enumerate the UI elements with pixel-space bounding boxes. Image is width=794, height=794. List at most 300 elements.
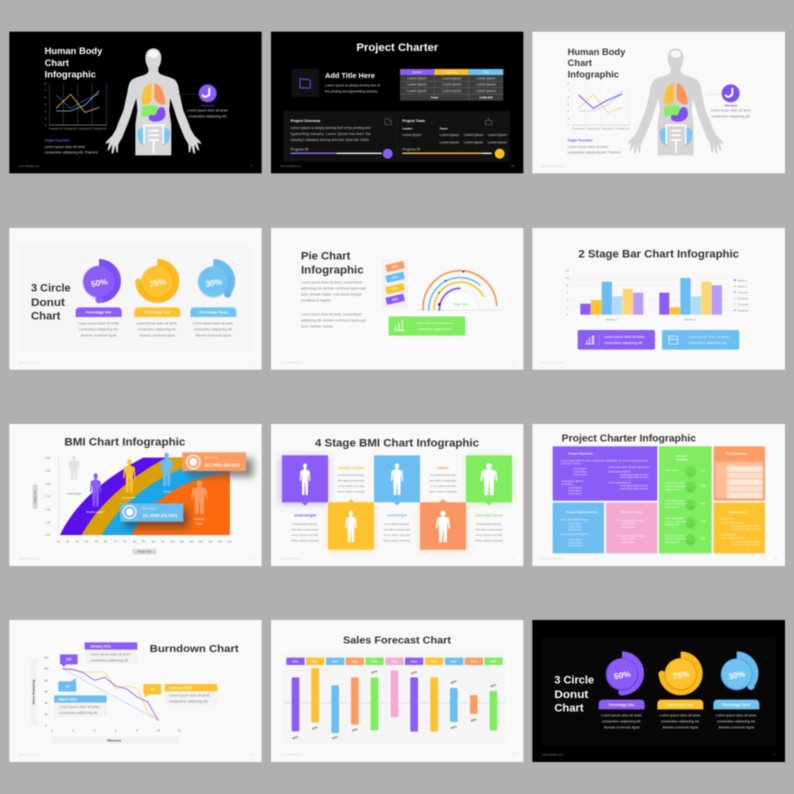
- green callout: Lorem ipsum dolor sit amet,: [417, 321, 454, 325]
- axes: 40: [57, 540, 60, 544]
- table: [400, 69, 503, 101]
- line chart: [568, 81, 630, 130]
- panel: project scope: Lorem ipsum dolor sit amet: [617, 534, 645, 537]
- axes: 1.70: [45, 495, 51, 499]
- panel: project timeline: Lorem ipsum: [665, 469, 679, 472]
- axes: Milestone: [107, 739, 122, 743]
- text block: add title: [325, 71, 380, 93]
- panel: project timeline: Lorem ipsum dolor: [665, 517, 685, 520]
- panel: project timeline: adipiscing elit: [665, 524, 679, 527]
- body illustration: [628, 48, 724, 155]
- axes: 0: [51, 728, 53, 732]
- panel: project overview: Lorem ipsum dolor sit: [561, 480, 584, 483]
- axes: 2: [72, 728, 74, 732]
- labels: Percentage One: [86, 311, 111, 315]
- footer: 8: [250, 557, 252, 561]
- stage: healthy weight: [328, 466, 374, 551]
- labels: Lorem ipsum dolor sit amet,: [716, 714, 757, 718]
- BMI bands: [60, 458, 230, 535]
- labels: consectetur adipiscing elit.: [137, 327, 177, 331]
- axes: 20: [45, 712, 48, 716]
- stage: clinically obese: of my entire soul, like: [476, 533, 503, 537]
- stage: underweight: has taken possession: [291, 528, 319, 532]
- axes: 90: [152, 540, 155, 544]
- axes: 40: [45, 701, 48, 705]
- footer: www.slidefab.com: [542, 753, 564, 757]
- table: Lorem ipsum: [476, 76, 496, 80]
- axes: 100: [44, 667, 49, 671]
- title: Burndown Chart: [150, 644, 239, 655]
- text block: organ function: [45, 138, 98, 154]
- panel: project timeline: adipiscing elit: [665, 488, 679, 491]
- panel: project overview: Project Overview: [568, 452, 593, 456]
- bar chart: Sample 1: [606, 318, 618, 322]
- panel: project overview: Lorem ipsum: [573, 470, 587, 473]
- stage: underweight: these sweet mornings: [291, 538, 319, 542]
- axes: 130: [227, 540, 232, 544]
- footer: [542, 753, 776, 757]
- footer: 10: [774, 557, 778, 561]
- stage: overweight: these sweet mornings: [383, 538, 411, 542]
- panel: project timeline: adipiscing elit: [665, 541, 679, 544]
- footer: 33: [511, 164, 514, 168]
- line chart: 5: [45, 102, 47, 106]
- percent labels: 80%: [312, 725, 319, 731]
- project team: Progress 90: [402, 148, 420, 152]
- line chart: 8: [568, 81, 570, 85]
- donut: 75 percent: 75%: [148, 276, 167, 289]
- panel: project timeline: 2021: [701, 503, 707, 505]
- labels: Lorem ipsum dolor sit amet,: [193, 321, 234, 325]
- labels: [599, 700, 759, 730]
- axes: 1.40: [45, 533, 51, 537]
- axes: 100: [170, 540, 175, 544]
- percent labels: 80%: [332, 735, 339, 741]
- callout: yellow value: 45: [150, 688, 154, 692]
- axes: 8: [136, 728, 138, 732]
- card: orange: BMI Range: [205, 456, 219, 460]
- table: Lorem ipsum: [407, 83, 427, 87]
- project team: Project Team: [402, 119, 426, 123]
- percent labels: 80%: [292, 735, 299, 741]
- labels: Aenean commodo ligula: [81, 333, 117, 337]
- axes: 120: [44, 655, 49, 659]
- text block: adipiscing elit. Aenean commodo ligula eget: [301, 286, 366, 290]
- card: blue: [120, 503, 188, 528]
- percent labels: 50%: [490, 683, 497, 689]
- panel: project overview: Lorem ipsum: [568, 493, 582, 496]
- project team: Leader:: [402, 127, 413, 131]
- text block: dolor. Aenean massa. Cum sociis natoque: [301, 292, 362, 296]
- footer: 5: [250, 360, 252, 364]
- stage: overweight: Overweight: [387, 513, 408, 517]
- text block: adipiscing elit. Aenean commodo ligula eget: [301, 318, 366, 322]
- callout: blue: Lorem ipsum dolor sit amet,: [688, 335, 729, 339]
- line chart: 5: [568, 102, 570, 106]
- tags: [382, 259, 492, 308]
- forecast bars: [292, 668, 497, 733]
- note: february: Lorem ipsum dolor sit amet,: [169, 693, 210, 697]
- year headers: 2013: [352, 659, 358, 663]
- stage: overweight: has taken possession: [383, 528, 411, 532]
- labels: consectetur adipiscing elit.: [79, 327, 118, 331]
- axes: 110: [189, 540, 194, 544]
- legend: Column4: [737, 296, 748, 300]
- project team: Lorem ipsum: [440, 140, 459, 144]
- title: Chart: [568, 58, 592, 68]
- project overview: typesetting industry. Lorem Ipsum has been the: [291, 132, 371, 136]
- axes: 65: [104, 540, 108, 544]
- axes: 105: [179, 540, 184, 544]
- footer: www.slidefab.com: [542, 557, 564, 561]
- title: Infographic: [301, 265, 364, 277]
- panel: 4 stage BMI slide: [271, 424, 523, 566]
- panel: burndown chart slide: [9, 620, 262, 762]
- bar chart: 0: [567, 313, 569, 317]
- card: blue: BMI Range: [143, 506, 156, 510]
- title: BMI Chart Infographic: [64, 437, 185, 449]
- panel: project scope: [606, 503, 657, 553]
- body illustration: [105, 48, 201, 155]
- text block: organ function: consectetur adipiscing elit. Praesent: [568, 150, 621, 154]
- callout: purple: Lorem ipsum dolor sit amet,: [604, 335, 645, 339]
- year headers: 2019: [471, 659, 477, 663]
- panel: project overview: Lorem ipsum dolor sit amet: [620, 487, 648, 490]
- panel: project overview: Lorem ipsum: [568, 487, 582, 490]
- stage: clinically obese: [466, 455, 512, 542]
- year headers: 2011: [312, 659, 318, 663]
- table: Budget: [412, 70, 422, 74]
- footer: 5: [774, 753, 776, 757]
- project team: Lorem ipsum: [464, 140, 483, 144]
- stage: clinically obese: has taken possession: [475, 528, 503, 532]
- text block: organ function: consectetur adipiscing elit. Praesent: [45, 150, 98, 154]
- panel: project overview: Lorem ipsum dolor sit amet, consectetur adipiscing elit, sed do eiusmod tempor: [561, 460, 649, 463]
- title: Infographic: [45, 70, 96, 80]
- table: Quantity: [446, 70, 458, 74]
- axes: 120: [208, 540, 213, 544]
- title: 3 Circle: [554, 675, 594, 687]
- project overview: industry's standard dummy text ever since the 1500s: [291, 138, 369, 142]
- tags: 80%: [392, 264, 399, 269]
- footer: www.slidefab.com: [18, 557, 40, 561]
- axes: [33, 456, 232, 554]
- footer: 9: [512, 557, 514, 561]
- donut: 50 percent: 50%: [90, 276, 109, 289]
- project team: Lorem ipsum: [464, 133, 483, 137]
- figures: Clinically: [194, 517, 205, 521]
- axes: 1.90: [45, 469, 51, 473]
- panel: human body chart dark slide: [9, 32, 262, 173]
- stage: underweight: A wonderful serenity: [292, 522, 318, 526]
- labels: Percentage Three: [722, 703, 750, 707]
- bar chart: [566, 269, 728, 322]
- panel: project team: Project Team: [728, 510, 747, 514]
- footer: www.slidefab.com: [280, 360, 302, 364]
- bar chart: 6: [567, 291, 569, 295]
- callout: stomach: consectetur adipiscing elit.: [188, 114, 227, 118]
- axes: Height (m): [33, 490, 37, 503]
- panel: 3 circle donut dark slide: [532, 620, 785, 762]
- panel: project overview: Lorem ipsum: [573, 473, 587, 476]
- project team: Team:: [440, 127, 448, 131]
- axes: 1.60: [45, 508, 51, 512]
- line chart: 6: [568, 95, 570, 99]
- panel: project charter infographic slide: [532, 424, 785, 566]
- donut: 50 percent: [606, 655, 640, 696]
- callout: purple: [578, 330, 655, 350]
- footer: 11: [250, 753, 253, 757]
- year headers: 2014: [371, 659, 378, 663]
- axes: 2.00: [45, 456, 51, 460]
- panel: project overview and team: [283, 111, 510, 162]
- panel: project budget: [714, 446, 765, 501]
- table: Total: [483, 70, 489, 74]
- text block: add title: the printing and typesetting industry: [325, 89, 378, 93]
- callout: stomach: Stomach: [725, 103, 737, 107]
- footer: [280, 557, 514, 561]
- title: [45, 46, 103, 80]
- panel: BMI chart slide: [9, 424, 262, 566]
- callout: blue: consectetur adipiscing elit.: [688, 341, 727, 345]
- donut: 50 percent: 50%: [613, 669, 632, 681]
- figures: Obese: [163, 490, 172, 494]
- stage: clinically obese: A wonderful serenity: [476, 522, 502, 526]
- table: Lorem ipsum: [476, 83, 496, 87]
- callout: blue value: [58, 678, 76, 692]
- panel: project overview: Lorem ipsum dolor sit: [608, 482, 631, 485]
- donut: 30 percent: [721, 655, 755, 690]
- note: march: March 2021: [59, 697, 77, 701]
- figures: Overweight: [122, 496, 135, 500]
- callout: purple: consectetur adipiscing elit.: [604, 341, 643, 345]
- year headers: [286, 658, 503, 665]
- panel: sales forecast slide: [271, 620, 523, 762]
- line chart: 6: [45, 95, 47, 99]
- project overview: Project Overview: [291, 119, 320, 123]
- panel: project scope: Lorem ipsum: [622, 526, 635, 529]
- labels: Aenean commodo ligula: [718, 726, 754, 730]
- labels: Percentage Two: [668, 703, 693, 707]
- line chart: 3: [45, 116, 47, 120]
- title: Chart: [45, 58, 69, 68]
- axes: 75: [123, 540, 127, 544]
- panel: project team: Lorem ipsum dolor sit amet: [732, 528, 760, 531]
- table: Lorem ipsum: [476, 89, 496, 93]
- labels: Lorem ipsum dolor sit amet,: [601, 714, 642, 718]
- text block: organ function: Organ Function: [568, 138, 592, 142]
- footer: [18, 753, 253, 757]
- axes: 60: [95, 540, 98, 544]
- panel: project budget: Project Budget: [726, 451, 747, 455]
- table: Total: [431, 95, 438, 99]
- text block: [301, 281, 366, 329]
- year headers: 2018: [451, 659, 457, 663]
- project team: Lorem ipsum: [488, 140, 507, 144]
- title: Chart: [554, 703, 584, 715]
- labels: Lorem ipsum dolor sit amet,: [660, 714, 701, 718]
- line chart: Category1 Category2 Category3 Category4: [49, 126, 107, 130]
- panel: project timeline: 2021: [701, 470, 707, 472]
- footer: 3: [774, 164, 776, 168]
- footer: www.slidefab.com: [18, 360, 40, 364]
- year headers: 2010: [292, 659, 299, 663]
- stage: overweight: of my entire soul, like: [384, 533, 411, 537]
- panel: project improvements: Lorem ipsum dolor sit amet: [560, 518, 588, 521]
- footer: [280, 164, 514, 168]
- panel: project team: Lorem ipsum dolor sit amet: [732, 525, 760, 528]
- labels: [76, 307, 236, 337]
- donut: 75 percent: 75%: [672, 669, 691, 681]
- percent labels: 80%: [450, 679, 457, 685]
- panel: project overview: Lorem ipsum: [568, 490, 582, 493]
- tags: 40%: [392, 286, 399, 291]
- callout: purple value: [60, 654, 78, 667]
- axes: 4: [94, 728, 96, 732]
- line chart: 2: [45, 123, 47, 127]
- footer: [18, 360, 252, 364]
- project team: [402, 118, 507, 159]
- bar chart: 10: [566, 276, 569, 280]
- card: orange: 21.000-26.021: [205, 462, 240, 467]
- panel: project team: Lorem ipsum dolor sit: [722, 537, 744, 540]
- footer: www.slidefab.com: [542, 164, 564, 168]
- text block: add title: Lorem Ipsum is simply dummy text of: [325, 83, 380, 87]
- panel: 2 stage bar chart slide: [532, 228, 785, 370]
- callout: blue: [662, 330, 739, 350]
- text block: organ function: [568, 138, 621, 154]
- note: january: January 2021: [90, 644, 111, 648]
- donut: 75 percent: [658, 655, 699, 692]
- panel: project timeline: Lorem ipsum dolor: [665, 499, 685, 502]
- labels: Aenean commodo ligula: [195, 333, 231, 337]
- panel: project overview: Lorem ipsum: [573, 467, 587, 470]
- note: march: Lorem ipsum dolor sit amet,: [59, 705, 100, 709]
- panel: project improvements: Lorem ipsum: [568, 529, 582, 532]
- figures: Healthy weight: [86, 510, 104, 514]
- callout: stomach: consectetur adipiscing elit.: [711, 114, 751, 118]
- labels: consectetur adipiscing elit.: [661, 720, 700, 724]
- panel: project overview: Lorem ipsum dolor sit amet: [620, 476, 648, 479]
- bar chart: 12: [566, 269, 569, 273]
- footer: 7: [774, 360, 776, 364]
- table: Lorem ipsum: [407, 89, 427, 93]
- panel: project timeline: Project: [677, 454, 687, 458]
- stage: healthy weight: has taken possession: [337, 479, 365, 483]
- table: Lorem ipsum: [442, 83, 462, 87]
- panel: project scope: Project Scope: [622, 510, 642, 514]
- labels: Lorem ipsum dolor sit amet,: [136, 321, 178, 325]
- percent labels: 50%: [470, 717, 477, 723]
- panel: project overview: Lorem ipsum dolor sit amet, consectetur: [608, 466, 650, 469]
- card: blue: 21.000-26.021: [143, 513, 178, 518]
- panel: project timeline: adipiscing elit: [665, 506, 679, 509]
- stage: obese: these sweet mornings: [429, 489, 457, 493]
- green callout: [389, 316, 465, 336]
- panel: project timeline: 2021: [701, 486, 707, 488]
- axes: 1.80: [45, 482, 51, 486]
- labels: consectetur adipiscing elit.: [194, 327, 233, 331]
- axes: 85: [142, 540, 146, 544]
- footer: www.slidefab.com: [280, 753, 302, 757]
- axes: 60: [45, 690, 48, 694]
- stage: underweight: [280, 455, 328, 542]
- line chart: [45, 81, 107, 130]
- axes: 95: [161, 540, 165, 544]
- axes: Weight (kg): [138, 550, 151, 554]
- axes: [31, 655, 181, 744]
- panel: project improvements: Lorem ipsum: [568, 544, 582, 547]
- axes: 12: [178, 728, 181, 732]
- year headers: 2015: [391, 659, 398, 663]
- bar chart: 4: [567, 298, 569, 302]
- axes: 80: [45, 678, 48, 682]
- title: Donut: [554, 689, 589, 701]
- panel: project overview: Lorem ipsum dolor sit: [608, 471, 631, 474]
- text block: organ function: Lorem ipsum dolor sit amet,: [45, 145, 86, 149]
- project team: Lorem ipsum: [488, 133, 507, 137]
- note: january: Lorem ipsum dolor sit amet,: [90, 653, 131, 657]
- labels: Lorem ipsum dolor sit amet,: [78, 321, 119, 325]
- title: Sales Forecast Chart: [343, 636, 452, 647]
- panel: project overview: Lorem ipsum dolor sit amet: [620, 473, 648, 476]
- text block: organ function: Organ Function: [45, 138, 69, 142]
- table: Lorem ipsum: [442, 89, 462, 93]
- rainbow chart: Your Title: [453, 303, 468, 307]
- callout: stomach: [707, 84, 752, 118]
- axes: 1.50: [45, 520, 51, 524]
- footer: www.slidefab.com: [18, 164, 40, 168]
- stage: healthy weight: Healthy weight: [338, 466, 365, 470]
- donut: 30 percent: 30%: [728, 669, 747, 681]
- percent labels: 50%: [411, 670, 418, 676]
- footer: [542, 360, 776, 364]
- title: Chart: [31, 311, 61, 323]
- figures: [67, 453, 208, 525]
- panel: project team: Team Leader:: [720, 517, 734, 520]
- line chart: 4: [568, 109, 570, 113]
- panel: project scope: Lorem ipsum: [622, 541, 635, 544]
- table: Lorem ipsum: [442, 76, 462, 80]
- donut: 30 percent: [197, 263, 232, 298]
- stage: healthy weight: A wonderful serenity: [338, 473, 364, 477]
- stage: obese: has taken possession: [429, 479, 457, 483]
- stage: clinically obese: these sweet mornings: [475, 538, 503, 542]
- green callout: consectetur adipiscing elit.: [417, 327, 453, 331]
- labels: Percentage Two: [145, 311, 170, 315]
- line chart: Category1 Category2 Category3 Category4: [572, 126, 630, 130]
- legend: Column3: [737, 290, 748, 294]
- stage: healthy weight: these sweet mornings: [337, 489, 365, 493]
- panel: project improvements: Lorem ipsum: [568, 526, 582, 529]
- project overview: Progress 55: [291, 148, 309, 152]
- labels: Aenean commodo ligula: [662, 726, 698, 730]
- percent labels: 70%: [351, 727, 358, 733]
- donut: 50 percent: [82, 263, 117, 303]
- footer: 3: [251, 164, 253, 168]
- labels: Aenean commodo ligula: [604, 726, 640, 730]
- labels: consectetur adipiscing elit.: [602, 720, 641, 724]
- stage: overweight: A wonderful serenity: [384, 522, 410, 526]
- footer: [542, 164, 776, 168]
- line chart: 2: [568, 123, 570, 127]
- axes: 10: [157, 728, 160, 732]
- bar chart: 2: [567, 305, 569, 309]
- percent labels: 50%: [371, 669, 378, 675]
- donut: 75 percent: [135, 263, 176, 299]
- legend: Column6: [737, 308, 748, 312]
- title: [31, 283, 71, 323]
